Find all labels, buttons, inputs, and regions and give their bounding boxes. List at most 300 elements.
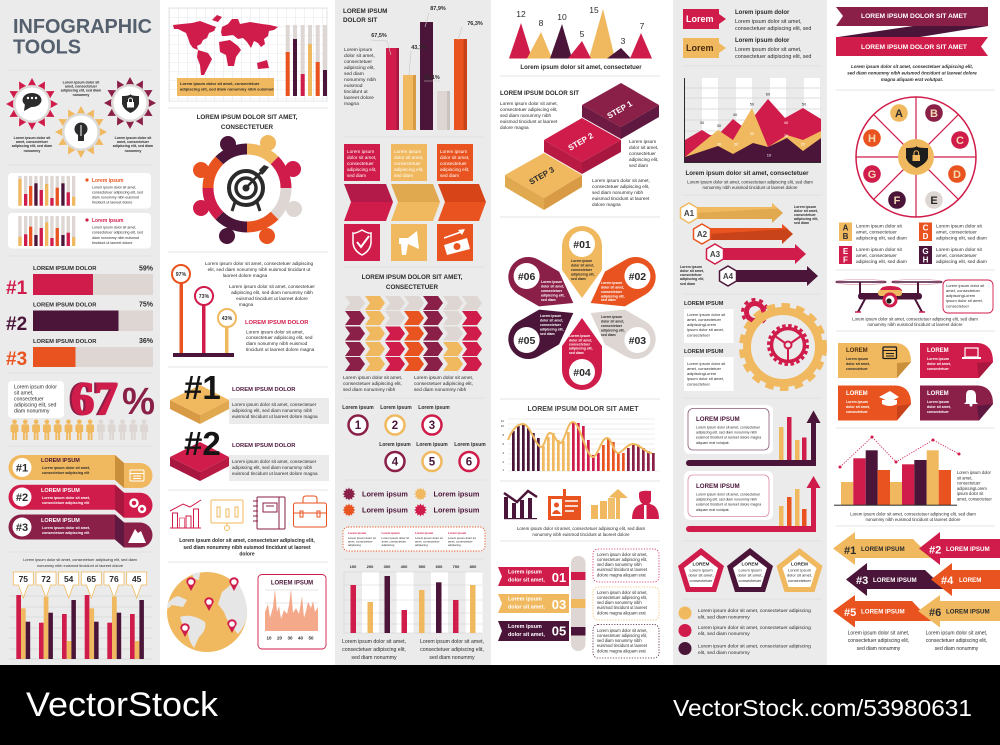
cards: folded tags [838, 343, 993, 420]
ranked item: #1 isometric block: #1 [184, 369, 221, 406]
petal 01: Lorem ipsum [571, 259, 592, 263]
stat: 67 percent with text box: Lorem ipsum dolor [14, 384, 57, 390]
tag row: yellow lorem: consectetuer adipiscing elit, sed [735, 54, 811, 60]
petal 04: consectetuer [569, 342, 591, 346]
footer: black watermark bar: VectorStock [26, 686, 219, 724]
chart: striped column chart: 600 [436, 564, 443, 569]
petal 04: #04 [573, 367, 591, 379]
stat: 67 percent with text box: adipiscing elit, sed [14, 402, 57, 408]
text: column notes: Lorem ipsum dolor sit amet, [420, 639, 484, 645]
tag row: crimson lorem: consectetuer adipiscing elit, sed [735, 26, 811, 32]
text: column chart note: consectetuer [344, 59, 372, 65]
list: numbered circles: Lorem ipsum [416, 442, 448, 448]
callout: dotted notes box: amet, consectetuer [382, 540, 406, 544]
chart: striped column chart [344, 564, 482, 633]
icon: speech bubble badge [6, 78, 58, 130]
ribbon 1: LOREM IPSUM [41, 458, 80, 464]
text: column chart note: sed diam [344, 71, 364, 77]
icon: gears [742, 300, 824, 388]
text: arrow notes: dolor sit amet, [794, 209, 818, 213]
text: arrow notes: sed diam [794, 221, 809, 225]
card: crimson growth chart [684, 471, 820, 532]
card: graduation cap: Lorem ipsum [846, 400, 868, 404]
text: step notes: sed diam [629, 163, 648, 168]
text: area caption: Lorem ipsum dolor sit amet, consectetuer adipiscing elit, sed diam [687, 180, 813, 184]
chart: 3D columns: 87,9% [430, 6, 446, 12]
chart: layered area: 30 [700, 120, 705, 125]
legend: letter tiles: amet, consectetuer [856, 253, 897, 259]
petal 04: dolor sit amet, [569, 338, 592, 342]
note box 3: sed diam nonummy nibh [597, 638, 642, 643]
chart: grouped bars with value tags: 65 [87, 574, 96, 584]
title [13, 15, 152, 58]
text: arrow captions: consectetuer adipiscing elit, [848, 638, 909, 644]
card: area chart: 20 [277, 636, 282, 640]
step 1 block [582, 83, 659, 139]
lollipop: 73%: 73% [199, 294, 210, 300]
pentagon plum [727, 548, 773, 592]
card: graduation cap: LOREM [846, 391, 868, 397]
text: arrow notes [680, 205, 818, 286]
text: badge captions: amet, consectetuer [16, 140, 49, 144]
text: steps intro: sed diam nonummy nibh [500, 113, 551, 118]
icon: line and bar chart [170, 500, 201, 528]
petal 05 [501, 296, 583, 366]
card: bell: consectetuer [927, 410, 949, 414]
petal 03 [581, 296, 663, 366]
text: icon row caption: Lorem ipsum dolor sit amet, consectetuer adipiscing elit, [179, 538, 315, 544]
arrow #5 [833, 595, 931, 628]
list: numbered circles: 4 [392, 456, 399, 468]
icon: presentation board [211, 500, 243, 530]
panel: column 4 [498, 5, 663, 658]
bar: rank 3, 36%: #3 [6, 349, 27, 370]
text: icon row caption: dolore [239, 552, 255, 558]
ribbon 3: LOREM IPSUM [41, 518, 80, 524]
text: arrow captions [848, 630, 987, 652]
list: numbered ribbons [8, 455, 152, 548]
step 3: money [437, 144, 486, 261]
note box 2: Lorem ipsum dolor sit amet, [597, 590, 648, 595]
pictogram: people row [11, 420, 148, 440]
chart: triangle peaks: 15 [589, 5, 599, 15]
card: plum growth chart: Lorem ipsum dolor sit amet, consectetuer [696, 426, 761, 430]
legend: letter tiles: G [922, 247, 929, 256]
diagram: lettered wheel: D [953, 169, 961, 181]
ranked item: #2 isometric block: adipiscing elit, sed diam nonummy nibh [232, 465, 313, 470]
note box 1: sed diam nonummy nibh [597, 562, 642, 567]
list: numbered circles: 5 [429, 456, 436, 468]
chart: layered area: 10 [767, 152, 772, 158]
block: gear notes: adipiscingLorem [687, 371, 717, 376]
legend: colored dots [678, 606, 811, 656]
callout: dotted notes box: Lorem ipsum [415, 531, 434, 535]
note box 1: dolore magna aliquam erat [597, 572, 647, 578]
chart: layered area: 30 [750, 131, 755, 136]
text: badge captions: adipiscing elit, sed diam [113, 144, 153, 148]
step 2 block: STEP 2 [567, 131, 595, 153]
legend: letter tiles: adipiscing elit, sed diam [936, 236, 987, 242]
pentagon crimson: LOREM [693, 562, 710, 566]
chart: striped column chart: 300 [384, 564, 391, 569]
callout: dotted notes box: Lorem ipsum dolor sit [415, 536, 443, 540]
pentagon plum: Lorem ipsum [738, 568, 762, 572]
banner: folded ribbon: LOREM IPSUM DOLOR SIT AMET [861, 44, 968, 51]
block: gear notes: amet, consectetuer [687, 317, 722, 322]
text: banner note: sed diam nonummy nibh euismod tincidunt ut laoreet dolore [847, 70, 977, 76]
arrow #1 [833, 532, 932, 565]
icon: shield lock badge [104, 77, 156, 129]
stat: 67 percent with text box: consectetuer [14, 396, 44, 402]
arrow #5: LOREM IPSUM [861, 608, 905, 616]
petal 06: #06 [518, 271, 536, 283]
panel: column 1 [0, 0, 160, 665]
note box 2: sed diam nonummy nibh [597, 600, 642, 605]
list: numbered circles: Lorem ipsum [380, 405, 412, 411]
diagram: lettered wheel: E [930, 195, 938, 207]
text: arrow captions: sed diam nonummy [857, 646, 901, 652]
pentagon crimson: Lorem ipsum [689, 568, 713, 572]
card: calendar: LOREM [846, 348, 868, 354]
panel: column 3 [335, 0, 491, 665]
text: arrow notes: Lorem ipsum [794, 205, 816, 209]
petal 04: Lorem ipsum [569, 334, 590, 338]
stat: 67 percent with text box: sit amet, [14, 390, 34, 396]
arrow #2 [919, 532, 1000, 565]
pentagon crimson: dolor sit amet, [688, 572, 714, 578]
card: calendar [838, 343, 911, 378]
text: badge captions: Lorem ipsum dolor sit [115, 136, 152, 140]
arrow A3: A3 [710, 250, 721, 259]
diagram: lettered wheel: H [868, 133, 876, 145]
chart: triangle peaks: 12 [516, 9, 526, 19]
step 3 block [505, 153, 582, 210]
text: icon row caption: Lorem ipsum dolor sit amet, consectetuer adipiscing elit, sed diam [517, 526, 646, 531]
chart: grouped bars with value tags: 45 [132, 574, 142, 584]
stat: 67 percent with text box: 67 [69, 373, 116, 425]
card: crimson growth chart: Lorem ipsum dolor sit amet, consectetuer [696, 492, 761, 496]
text: drone caption: nonummy nibh euismod tincidunt ut laoreet dolore [867, 322, 963, 327]
arrow #3: #3 [856, 575, 868, 587]
card: laptop: dolor sit amet, [927, 362, 951, 366]
petal 05: #05 [518, 335, 536, 347]
text: column chart note: euismod [344, 83, 363, 89]
card: small bar chart 1: Lorem ipsum [92, 178, 124, 184]
tag row: yellow lorem: Lorem ipsum dolor sit amet, [735, 47, 802, 53]
tag row: crimson lorem [683, 9, 811, 32]
chart: striped bars with wave: 12 [501, 419, 504, 423]
petal 01: #01 [573, 239, 591, 251]
list: numbered circles: Lorem ipsum [454, 442, 486, 448]
icon: growth bars [591, 489, 628, 519]
note box 1: euismod tincidunt ut laoreet [597, 567, 648, 572]
text: chart caption: Lorem ipsum dolor sit amet, consectetuer adipiscing elit, sed diam [23, 557, 137, 562]
note box 2: euismod tincidunt ut laoreet [597, 605, 648, 610]
stat: 67 percent with text box: 67 [71, 373, 118, 425]
bar: rank 3, 36%: 36% [139, 338, 154, 345]
title: INFOGRAPHIC [13, 15, 152, 38]
text: column chart note: nonummy nibh [344, 77, 376, 83]
lollipop: 43% [218, 309, 236, 353]
card: small bar chart 2: consectetuer adipiscing elit, sed [92, 230, 143, 234]
chart: bars with dotted trend: consectetuer [957, 480, 981, 486]
callout: drone note [943, 280, 993, 313]
list: pentagons [678, 548, 822, 592]
callout: drone note: amet, consectetuer [946, 288, 981, 293]
chart: grouped bars with value tags: 54 [64, 574, 74, 584]
chart: striped column chart: 500 [419, 564, 426, 569]
text: lollipop notes: laoreet dolore magna [223, 273, 268, 278]
legend: letter tiles: E [843, 247, 849, 256]
card: plum growth chart: aliquam erat volutpat. [696, 441, 729, 445]
text: step notes: euismod tincidunt ut laoreet [592, 196, 650, 201]
step 2: megaphone: dolor sit amet, [394, 155, 423, 160]
legend: letter tiles: amet, consectetuer [936, 230, 977, 236]
callout: dotted notes box: adipiscing [415, 543, 428, 547]
callout: dotted notes box: Lorem ipsum [382, 531, 400, 535]
text: badge captions: adipiscing elit, sed diam [61, 88, 101, 92]
chart: striped bars with wave: 6 [502, 442, 504, 446]
chart: striped column chart: 700 [453, 564, 460, 569]
petal 05: adipiscing elit, [540, 328, 564, 332]
pentagon crimson: consectetuer [690, 578, 713, 583]
ribbon 01: dolor sit amet, [508, 578, 545, 584]
chart: striped bars with wave: 8 [502, 433, 504, 437]
arrow #4: #4 [941, 575, 954, 587]
ribbon 3: consectetuer adipiscing elit [42, 531, 90, 535]
chart: layered area: 50 [750, 102, 755, 106]
heading: wave chart: LOREM IPSUM DOLOR SIT AMET [528, 406, 639, 413]
legend: letter tiles: amet, consectetuer [936, 253, 977, 259]
arrow #2: #2 [929, 544, 941, 556]
card: plum growth chart: euismod tincidunt ut laoreet dolore magna [696, 436, 761, 440]
ribbon 1: Lorem ipsum dolor sit amet, [42, 466, 90, 470]
chart: triangle peaks: 7 [640, 21, 645, 31]
text: bar chart caption: Lorem ipsum dolor sit amet, consectetuer adipiscing elit, sed diam [850, 512, 976, 516]
legend: letter tiles: adipiscing elit, sed diam [856, 236, 907, 242]
pentagon yellow: LOREM [791, 562, 808, 566]
text: step notes: sed diam nonummy nibh [592, 190, 643, 195]
text: badge captions: amet, consectetuer [117, 140, 150, 144]
chart: layered area: 40 [733, 112, 738, 117]
text: column chart note: tincidunt ut [344, 89, 368, 95]
petal 02 [581, 250, 663, 320]
pentagon crimson [678, 548, 724, 592]
bar: rank 1, 59%: LOREM IPSUM DOLOR [33, 266, 97, 272]
petal 05: Lorem ipsum [540, 314, 561, 318]
petal 01: adipiscing elit, [571, 272, 595, 276]
icon: businessman [632, 491, 659, 519]
ribbon 3: Lorem ipsum dolor sit amet, [42, 526, 90, 530]
ribbon 05: Lorem ipsum [508, 624, 542, 630]
icon row: solid business icons [504, 489, 659, 520]
text: lollipop notes: tincidunt ut laoreet dolore magna [246, 347, 315, 352]
pentagon plum: dolor sit amet, [737, 572, 763, 578]
callout: dotted notes box [343, 527, 485, 551]
text: lollipop notes: Lorem ipsum dolor sit amet, [246, 330, 304, 334]
icon: notebook [253, 497, 285, 529]
card: small bar chart 2: tincidunt ut laoreet dolore [92, 241, 132, 245]
ribbon 01 [498, 567, 569, 586]
chart: triangle peaks: 8 [539, 18, 544, 28]
text: peaks caption: Lorem ipsum dolor sit amet, consectetuer [520, 64, 642, 71]
arrow #4: LOREM [959, 577, 981, 584]
card: graduation cap [838, 386, 911, 420]
diagram: six petal flower [501, 226, 663, 390]
callout: dotted notes box: adipiscing [382, 543, 395, 547]
banner: folded ribbon [836, 7, 990, 56]
tag row: yellow lorem: Lorem ipsum dolor [735, 38, 790, 44]
chart: striped column chart: 200 [367, 564, 374, 569]
text: arrow notes: Lorem ipsum [680, 265, 702, 269]
block: gear notes: amet, consectetuer [687, 366, 722, 371]
legend: letter tiles: adipiscing elit, sed diam [856, 259, 907, 265]
bar: rank 2, 75% [6, 302, 154, 335]
step 3: money: dolor sit amet, [440, 155, 469, 160]
petal 05: sed diam [540, 332, 555, 336]
card: area chart: 10 [266, 636, 272, 640]
callout: dotted notes box: Lorem ipsum [348, 531, 367, 535]
ranked item: #1 isometric block: euismod tincidunt ut laoreet dolore magna [232, 414, 318, 419]
pentagon plum: consectetuer [739, 578, 762, 583]
icon: shield lock [906, 146, 928, 168]
callout: dotted notes box: adipiscing [348, 543, 361, 547]
text: column notes: sed diam nonummy [429, 655, 475, 661]
diagram: lettered wheel: A [895, 108, 903, 120]
chart: layered area: 60 [766, 92, 771, 96]
legend: letter tiles: Lorem ipsum dolor sit [936, 224, 983, 230]
block: gear notes: Lorem ipsum dolor sit [687, 312, 726, 317]
heading: target ring: CONSECTETUER [221, 124, 274, 131]
ranked item: #2 isometric block: Lorem ipsum dolor sit amet, consectetuer [232, 459, 317, 464]
ribbon 03: dolor sit amet, [508, 604, 545, 610]
ribbon 03: Lorem ipsum [508, 596, 542, 602]
text: arrow captions: Lorem ipsum dolor sit amet, [848, 630, 909, 636]
diagram: isometric steps [505, 83, 659, 210]
note box 3: euismod tincidunt ut laoreet [597, 643, 648, 648]
card: area chart: 50 [308, 636, 314, 640]
petal 04 [562, 318, 602, 390]
legend: letter tiles: amet, consectetuer [856, 230, 897, 236]
card: area chart: LOREM IPSUM [271, 580, 313, 586]
petal 02: adipiscing elit, [601, 294, 625, 298]
ribbon 1 [8, 455, 152, 488]
text: step notes: Lorem ipsum [629, 139, 656, 144]
step 2: megaphone: adipiscing elit, [394, 167, 423, 172]
legend: letter tiles: H [923, 256, 929, 264]
arrow #6 [918, 595, 1000, 628]
text: drone caption: Lorem ipsum dolor sit amet, consectetuer adipiscing elit, sed diam [852, 316, 978, 322]
petal 01: consectetuer [571, 268, 593, 272]
icon: id badge [548, 489, 581, 520]
petal 01 [562, 226, 602, 298]
card: small bar chart 2: Lorem ipsum dolor sit amet, [92, 226, 136, 230]
chart: 3D columns: 67,5% [371, 33, 387, 39]
card: laptop: LOREM [927, 348, 949, 354]
stat: 67 percent with text box: diam nonummy [14, 408, 50, 414]
legend: colored dots: elit, sed diam nonummy [698, 631, 750, 637]
note box 3 [593, 624, 659, 658]
text: matrix notes: Lorem ipsum dolor sit amet, [414, 375, 473, 381]
step 3: money: adipiscing elit, [440, 167, 469, 172]
icon row: outline business icons [170, 496, 326, 530]
chart: bars with dotted trend: adipiscingLorem [957, 486, 987, 491]
text: arrow captions: consectetuer adipiscing elit, [926, 638, 987, 644]
legend: letter tiles: Lorem ipsum dolor sit [856, 247, 903, 253]
ribbon 3 [8, 514, 152, 548]
label: map caption: adipiscing elit, sed diam nonummy nibh euismod [180, 86, 274, 92]
callout: drone note: Lorem ipsum dolor sit [946, 283, 985, 288]
chart: striped bars with wave: 2 [502, 460, 504, 464]
pentagon yellow: dolor sit amet, [787, 572, 812, 578]
bar: rank 2, 75%: #2 [6, 314, 27, 335]
diagram: lettered wheel: B [930, 108, 938, 120]
text: lollipop notes: magna [239, 302, 254, 307]
block: gear notes: ipsum dolor sit amet, [687, 327, 724, 332]
bar: rank 3, 36%: LOREM IPSUM DOLOR [33, 339, 97, 345]
text: steps intro: Lorem ipsum dolor sit amet, [500, 101, 558, 106]
tag row: yellow lorem: Lorem [686, 43, 714, 53]
text: badge captions: Lorem ipsum dolor sit [14, 136, 51, 140]
step 2 block [544, 118, 621, 174]
chart: layered area: 30 [717, 142, 722, 146]
text: badge captions: adipiscing elit, sed diam [12, 144, 52, 148]
bar: rank 1, 59% [6, 266, 154, 299]
card: bell: LOREM [927, 391, 949, 397]
diagram: globe with pins [167, 572, 247, 652]
petal 04: sed diam [569, 351, 584, 355]
callout: drone note: ipsum dolor sit amet, [946, 298, 983, 303]
callout: dotted notes box: adipiscing [448, 543, 461, 547]
list: numbered left arrows [833, 532, 1000, 628]
chart: striped bars with wave: 10 [501, 424, 504, 428]
ribbon 01: Lorem ipsum [508, 570, 542, 576]
text: steps intro: dolore magna [500, 125, 529, 130]
ranked item: #2 isometric block [170, 425, 329, 481]
text: column notes: consectetuer adipiscing elit, [420, 647, 484, 653]
text: step notes: Lorem ipsum dolor sit amet, [592, 178, 650, 183]
step 1: shield: consectetuer [347, 161, 374, 166]
callout: dotted notes box: amet, consectetuer [348, 540, 373, 544]
text: icon row caption: nonummy nibh euismod tincidunt ut laoreet dolore [532, 532, 630, 537]
chart: triangle peaks [509, 5, 652, 58]
diagram: lettered wheel: F [894, 195, 901, 207]
card: crimson growth chart: LOREM IPSUM [696, 483, 740, 490]
list: odd ribbon tags with timeline [498, 549, 659, 658]
heading: column chart: LOREM IPSUM [343, 8, 387, 15]
callout: dotted notes box: amet, consectetuer [415, 540, 440, 544]
heading: column chart: DOLOR SIT [343, 17, 377, 24]
illustration: drone [835, 280, 943, 312]
chart: striped bars with wave: 1 [502, 468, 504, 472]
petal 06: dolor sit amet, [541, 284, 564, 288]
map block: world map with grid [169, 8, 327, 101]
list: numbered circles: 1 [355, 420, 362, 432]
text: arrow notes: sed diam [680, 282, 695, 286]
icon group: three sun badges [6, 77, 156, 158]
legend: letter tiles: Lorem ipsum dolor sit [936, 247, 983, 253]
card: small bar chart 1: Lorem ipsum dolor sit amet, [92, 186, 136, 190]
text: lollipop notes: LOREM IPSUM DOLOR [245, 320, 309, 326]
heading: target ring: LOREM IPSUM DOLOR SIT AMET, [197, 114, 298, 121]
card: crimson growth chart: aliquam erat volutpat. [696, 508, 729, 512]
text: column notes: Lorem ipsum dolor sit amet, [342, 639, 406, 645]
legend: letter tiles: A [843, 224, 849, 232]
card: bell [920, 386, 993, 420]
diagram: lettered wheel: G [868, 169, 876, 181]
text: column chart note: laoreet dolore [344, 95, 374, 101]
chart: layered area: 30 [734, 142, 739, 146]
